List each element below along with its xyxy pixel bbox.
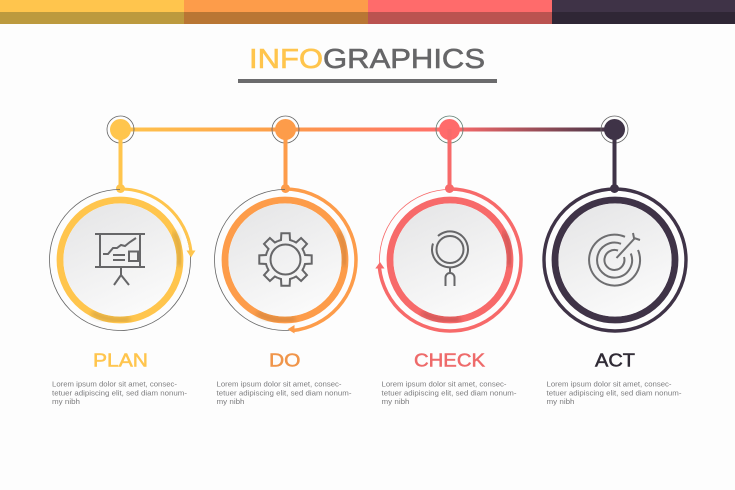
text: check description: tetuer adipiscing elit, sed diam nonum- [382, 388, 517, 398]
text: plan description: Lorem ipsum dolor sit amet, consec- [52, 380, 178, 388]
label: do: DO [269, 350, 300, 370]
text: check description: my nibh [382, 397, 410, 406]
step: do [214, 116, 356, 406]
text: act description: my nibh [546, 397, 574, 406]
step: check [375, 116, 521, 406]
title underline [238, 79, 497, 83]
circle: plan [50, 189, 196, 330]
text: do description [216, 380, 352, 406]
text: do description: tetuer adipiscing elit, sed diam nonum- [216, 388, 352, 398]
text: act description [546, 380, 682, 406]
node: check [436, 116, 463, 193]
node: act [601, 116, 628, 193]
node: plan [107, 116, 134, 193]
label: act: ACT [595, 350, 635, 370]
timeline connector [120, 128, 614, 132]
icon: target [589, 233, 640, 286]
top colour bar [0, 0, 735, 24]
label: check: CHECK [414, 350, 486, 370]
circle: check [375, 189, 521, 331]
text: plan description: tetuer adipiscing elit, sed diam nonum- [52, 388, 188, 398]
label: plan: PLAN [93, 350, 148, 370]
step: act [544, 116, 686, 406]
step: plan [50, 116, 196, 406]
icon: presentation board [95, 234, 145, 285]
icon: gear [259, 233, 312, 286]
text: do description: Lorem ipsum dolor sit amet, consec- [216, 380, 342, 388]
text: check description: Lorem ipsum dolor sit amet, consec- [382, 380, 507, 388]
text: plan description: my nibh [52, 397, 80, 406]
text: do description: my nibh [216, 397, 244, 406]
text: check description [382, 380, 517, 406]
icon: magnifier [432, 231, 468, 286]
text: act description: tetuer adipiscing elit, sed diam nonum- [546, 388, 682, 398]
text: plan description [52, 380, 188, 406]
circle: do [214, 189, 356, 334]
title: INFO GRAPHICS [249, 43, 485, 74]
text: act description: Lorem ipsum dolor sit amet, consec- [546, 380, 672, 388]
circle: act [544, 189, 686, 331]
node: do [272, 116, 299, 193]
